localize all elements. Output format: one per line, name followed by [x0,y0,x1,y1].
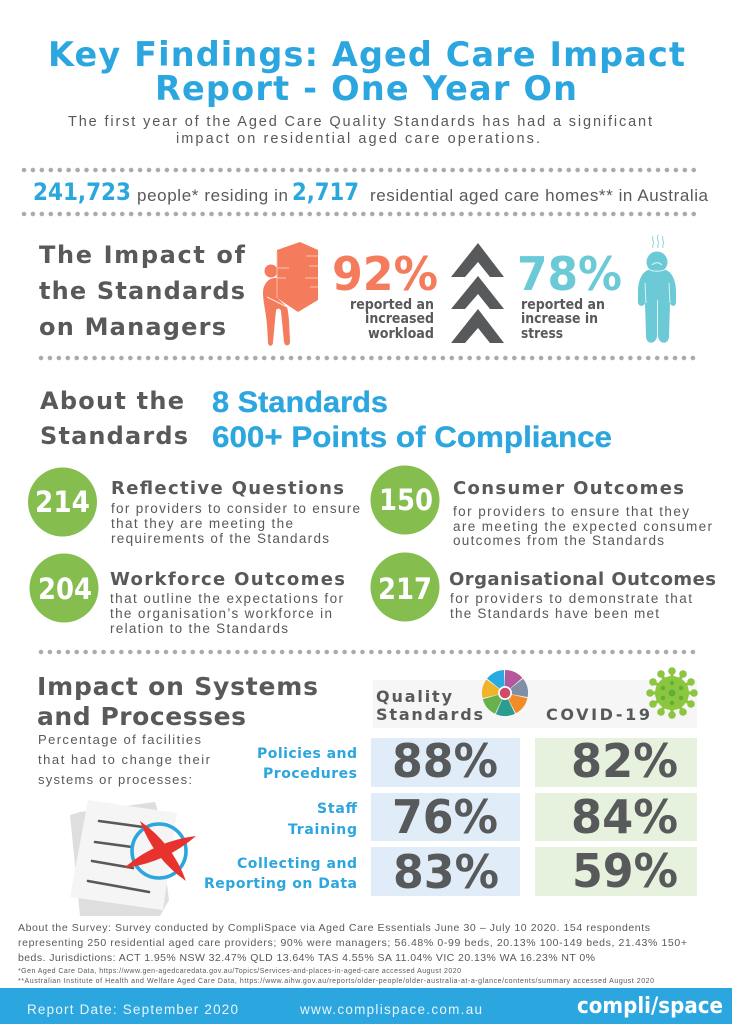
item: organisational outcomes [370,552,716,622]
subtitle [68,114,652,147]
stat: 78 percent stress: 78% [517,247,622,301]
survey notes [18,922,687,964]
stat: 78 percent stress: reported an [521,297,605,313]
footer bar [0,988,732,1024]
intro text [38,732,211,787]
heading: impact on managers [39,241,246,341]
standards totals: 8 Standards [212,386,388,419]
stat: 78 percent stress: stress [521,326,563,342]
heading: impact on systems: and Processes [37,702,246,731]
icon: virus [646,667,698,719]
item: reflective questions: that they are meeting the [111,516,293,531]
icon: standards wheel [484,672,526,714]
item: workforce outcomes: the organisation’s workforce in [110,606,332,621]
row label: staff training: Training [288,822,357,838]
heading: impact on systems [37,672,318,731]
survey notes: beds. Jurisdictions: ACT 1.95% NSW 32.47% QLD 13.64% TAS 4.55% SA 11.04% VIC 20.13% WA 16.23% NT 0% [18,952,595,964]
footnotes: *Gen Aged Care Data, https://www.gen-agedcaredata.gov.au/Topics/Services-and-places-in-aged-care accessed August 2020 [18,968,461,975]
item: organisational outcomes: for providers to demonstrate that [450,591,692,606]
covid-19 values: 82% [571,734,678,788]
headline statistic: residential aged care homes** in Australia [370,186,709,205]
footer bar: Report Date: September 2020 [27,1002,238,1017]
stat: 92 percent workload: 92% [332,247,438,301]
item: reflective questions: 214 [35,485,90,519]
intro text: systems or processes: [38,772,192,787]
headline statistic: people* residing in [137,186,288,205]
item: workforce outcomes: that outline the expectations for [110,591,344,606]
item: consumer outcomes: 150 [379,483,433,517]
item: consumer outcomes: Consumer Outcomes [453,478,684,499]
row label: policies and procedures [257,746,357,782]
quality standards values [371,734,520,899]
footnotes [18,968,654,985]
item: reflective questions [28,468,360,546]
stat: 78 percent stress: increase in [521,311,598,327]
item: reflective questions: for providers to consider to ensure [111,501,360,516]
row label: collecting and reporting: Reporting on Data [204,876,357,892]
item: consumer outcomes: are meeting the expected consumer [453,519,712,534]
stat: 92 percent workload [332,247,438,342]
comparison header band [373,680,697,728]
survey notes: representing 250 residential aged care providers; 90% were managers; 56.48% 0-99 beds, 20.13% 100-149 beds, 21.43% 150+ [18,937,687,949]
standards totals: 600+ Points of Compliance [212,421,612,454]
item: workforce outcomes: 204 [38,572,92,606]
row label: staff training [288,801,358,838]
icon: person carrying boxes [263,242,318,346]
item: reflective questions: Reflective Questions [111,478,344,499]
icon: stressed person [638,235,676,343]
row label: policies and procedures: Procedures [263,766,357,782]
column header: quality standards [376,687,483,724]
headline statistic [33,178,709,206]
quality standards values: 76% [392,790,498,844]
heading: about the standards [40,387,188,450]
row label: collecting and reporting: Collecting and [237,856,357,872]
icon: upward chevrons [451,243,504,343]
title [48,35,685,108]
heading: impact on managers: on Managers [39,313,226,341]
item: workforce outcomes [30,554,345,636]
item: consumer outcomes: outcomes from the Standards [453,533,664,548]
row label: policies and procedures: Policies and [257,746,357,762]
intro text: that had to change their [38,752,211,767]
footnotes: **Australian Institute of Health and Welfare Aged Care Data, https://www.aihw.gov.au/reports/older-people/older-australia-at-a-glance/contents/summary accessed August 2020 [18,978,654,985]
item: organisational outcomes: Organisational Outcomes [449,569,716,590]
covid-19 values: 84% [571,790,678,844]
item: organisational outcomes: 217 [378,572,432,606]
covid-19 values: 59% [572,844,678,898]
heading: impact on systems: Impact on Systems [37,672,318,701]
heading: impact on managers: The Impact of [39,241,246,269]
quality standards values: 83% [393,845,499,899]
title: Key Findings: Aged Care Impact [48,35,685,74]
column header: quality standards: Standards [376,705,483,724]
heading: about the standards: Standards [40,422,188,450]
covid-19 values [535,734,697,898]
quality standards values: 88% [392,734,498,788]
standards totals [212,386,612,454]
headline statistic: 2,717 [292,178,359,206]
subtitle: impact on residential aged care operations. [176,131,540,147]
item: workforce outcomes: Workforce Outcomes [110,569,345,590]
icon: documents with cross [70,800,196,916]
title: Report - One Year On [155,69,577,108]
item: consumer outcomes [370,466,712,548]
stat: 78 percent stress [517,247,622,342]
subtitle: The first year of the Aged Care Quality Standards has had a significant [68,114,652,130]
row label: collecting and reporting [204,856,357,892]
survey notes: About the Survey: Survey conducted by CompliSpace via Aged Care Essentials June 30 – July 10 2020. 154 respondents [18,922,650,934]
item: organisational outcomes: the Standards have been met [450,606,659,621]
item: consumer outcomes: for providers to ensure that they [453,504,689,519]
stat: 92 percent workload: workload [368,326,434,342]
intro text: Percentage of facilities [38,732,202,747]
stat: 92 percent workload: reported an [350,297,434,313]
headline statistic: 241,723 [33,178,131,206]
column header: covid-19: COVID-19 [546,705,650,724]
column header: quality standards: Quality [376,687,453,706]
stat: 92 percent workload: increased [365,311,434,327]
row label: staff training: Staff [317,801,358,817]
item: workforce outcomes: relation to the Standards [110,621,288,636]
heading: impact on managers: the Standards [39,277,245,305]
item: reflective questions: requirements of the Standards [111,531,329,546]
footer bar: www.complispace.com.au [299,1002,482,1017]
heading: about the standards: About the [40,387,184,415]
